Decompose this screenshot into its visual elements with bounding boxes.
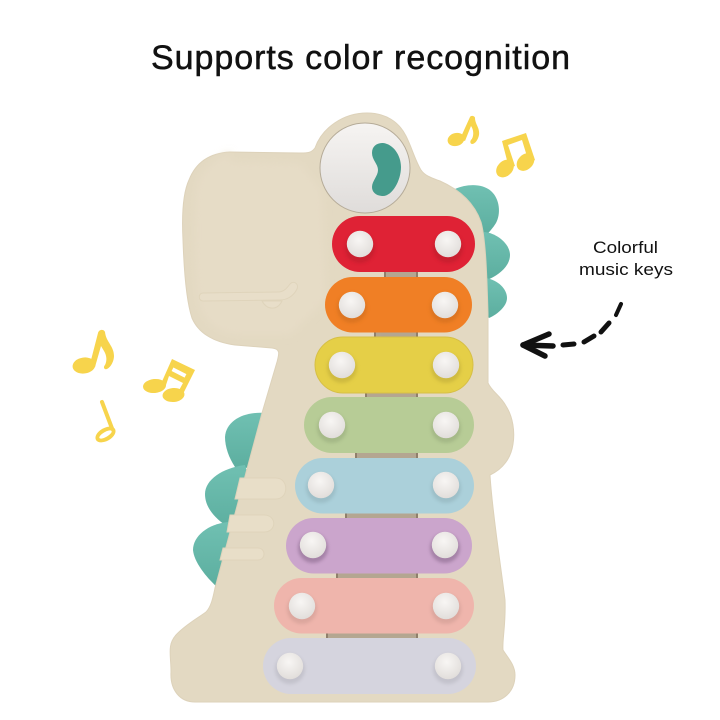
key: pink	[274, 578, 474, 634]
key: red	[332, 216, 475, 272]
key: blue	[295, 458, 474, 514]
icon: teal back spikes left	[193, 413, 275, 587]
key: orange	[325, 277, 472, 332]
icon: music note top small	[446, 116, 479, 148]
mouth line	[199, 282, 297, 308]
callout label	[579, 239, 673, 279]
callout label: music keys	[579, 261, 673, 279]
icon: music note left hollow	[93, 402, 118, 446]
head highlight	[194, 152, 326, 335]
icon: eye	[320, 123, 410, 213]
callout label: Colorful	[593, 239, 658, 257]
arrow: dashed to keys	[523, 304, 621, 356]
key: yellow	[315, 337, 473, 393]
key support rails	[326, 270, 418, 640]
title: Supports color recognition	[151, 39, 570, 77]
dinosaur body	[170, 113, 515, 702]
key: lavender	[263, 638, 476, 694]
leg ridges	[220, 478, 286, 560]
key: purple	[286, 518, 472, 574]
icon: music note left beamed	[142, 359, 195, 403]
pupil	[372, 143, 401, 196]
key: green	[304, 397, 474, 453]
icon: music note top double	[493, 133, 538, 181]
icon: teal back spikes right	[455, 185, 510, 318]
icon: music note left single	[71, 330, 114, 375]
